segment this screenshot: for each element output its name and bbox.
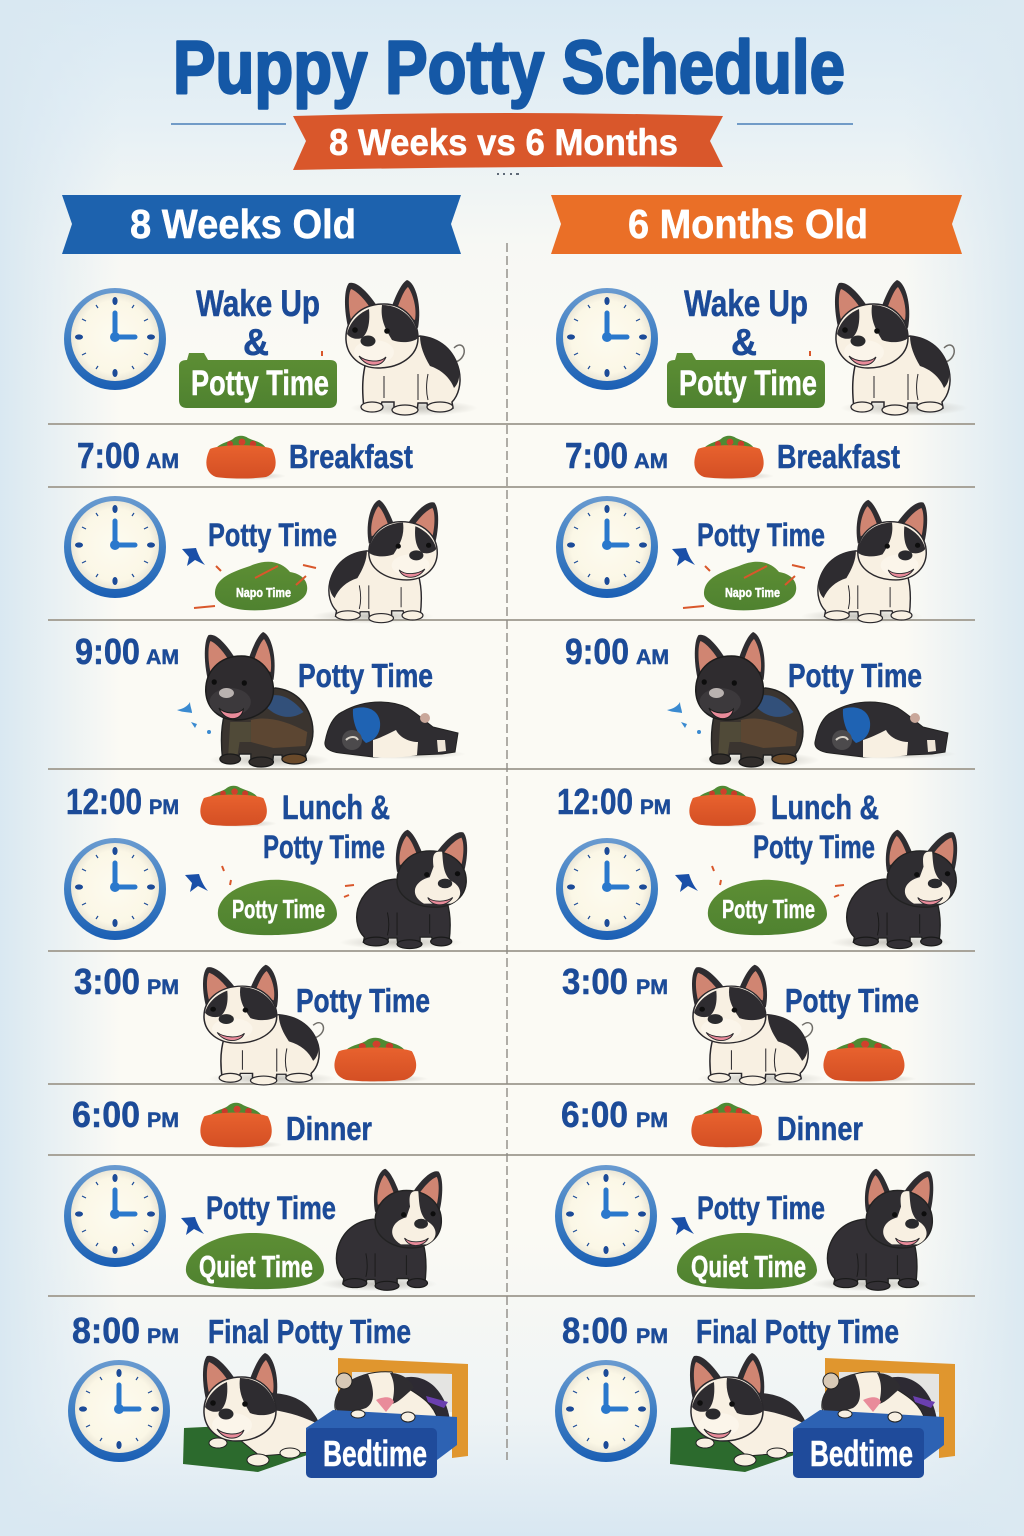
row: final potty and bedtime: 8:00 — [72, 1310, 140, 1351]
row: dinner: 6:00 — [561, 1094, 628, 1135]
title: Puppy Potty Schedule — [173, 25, 845, 109]
row: dinner: 6:00 — [72, 1094, 140, 1135]
row: breakfast: Breakfast — [289, 438, 413, 475]
row: lunch and potty: Lunch & — [771, 789, 879, 827]
row: wake up: Potty Time — [191, 364, 329, 403]
row: final potty and bedtime: Bedtime — [323, 1433, 427, 1474]
row: lunch and potty: Potty Time — [263, 829, 385, 865]
row: lunch and potty: PM — [640, 796, 671, 819]
row: 3:00 potty: Potty Time — [296, 982, 430, 1019]
row: lunch and potty: PM — [149, 796, 179, 819]
row: potty and nap: Napo Time — [236, 585, 291, 600]
row: breakfast: 7:00 — [77, 435, 140, 476]
row: wake up: & — [731, 322, 757, 363]
row: dinner: PM — [147, 1109, 179, 1132]
row: 9:00 potty — [565, 631, 956, 768]
row: wake up — [556, 280, 968, 416]
row: wake up: Wake Up — [684, 283, 808, 324]
row: lunch and potty: 12:00 — [66, 781, 142, 822]
row: final potty and bedtime: PM — [636, 1325, 668, 1348]
row: final potty and bedtime: PM — [147, 1325, 179, 1348]
subtitle ribbon: 8 Weeks vs 6 Months — [329, 122, 678, 163]
row: 3:00 potty: 3:00 — [562, 961, 628, 1002]
row: dinner — [72, 1094, 372, 1149]
row: 9:00 potty: 9:00 — [565, 631, 629, 672]
row: 3:00 potty — [562, 961, 919, 1086]
row: potty and quiet time: Potty Time — [206, 1190, 336, 1226]
row: final potty and bedtime: Final Potty Time — [208, 1313, 411, 1350]
row: lunch and potty: Potty Time — [232, 894, 325, 924]
row: final potty and bedtime — [555, 1310, 955, 1478]
row: potty and quiet time — [555, 1165, 933, 1291]
row: breakfast: Breakfast — [777, 438, 900, 475]
row: potty and nap: Potty Time — [697, 517, 825, 553]
row: wake up: & — [243, 322, 269, 363]
row: breakfast: 7:00 — [565, 435, 628, 476]
row: dinner: Dinner — [286, 1110, 372, 1147]
row: potty and quiet time: Potty Time — [697, 1190, 825, 1226]
row: potty and quiet time: Quiet Time — [199, 1249, 313, 1284]
row: 9:00 potty: Potty Time — [788, 657, 922, 694]
row: 3:00 potty: 3:00 — [74, 961, 140, 1002]
row: dinner — [561, 1094, 863, 1149]
row: potty and quiet time — [64, 1165, 442, 1291]
row: 9:00 potty: 9:00 — [75, 631, 140, 672]
row: wake up: Wake Up — [196, 283, 320, 324]
subtitle ribbon — [171, 113, 853, 174]
row: potty and quiet time: Quiet Time — [691, 1249, 806, 1284]
row: dinner: Dinner — [777, 1110, 863, 1147]
row: 3:00 potty: Potty Time — [785, 982, 919, 1019]
row: 9:00 potty: AM — [146, 646, 179, 669]
row: 3:00 potty: PM — [147, 976, 179, 999]
row: wake up: Potty Time — [679, 364, 817, 403]
header: 6 months old: 6 Months Old — [628, 201, 868, 247]
row: potty and nap — [64, 496, 438, 624]
row: wake up — [64, 280, 478, 416]
panel: 8 weeks column — [64, 280, 478, 1478]
row: 3:00 potty — [74, 961, 430, 1086]
header: 8 weeks old: 8 Weeks Old — [130, 201, 356, 247]
header: 8 weeks old — [62, 195, 461, 254]
row: final potty and bedtime: Bedtime — [810, 1433, 913, 1474]
row: lunch and potty: 12:00 — [557, 781, 633, 822]
row: breakfast — [565, 435, 900, 480]
row: final potty and bedtime: Final Potty Time — [696, 1313, 899, 1350]
row: lunch and potty: Potty Time — [753, 829, 875, 865]
row: potty and nap: Potty Time — [208, 517, 337, 553]
row: lunch and potty: Lunch & — [282, 789, 390, 827]
row: 9:00 potty: AM — [636, 646, 669, 669]
row: final potty and bedtime: 8:00 — [562, 1310, 628, 1351]
header: 6 months old — [551, 195, 962, 254]
row: final potty and bedtime — [68, 1310, 468, 1478]
row: potty and nap — [556, 496, 927, 624]
row: 9:00 potty: Potty Time — [298, 657, 433, 694]
row: lunch and potty — [556, 781, 957, 949]
row: potty and nap: Napo Time — [725, 585, 780, 600]
row: breakfast: AM — [146, 450, 179, 473]
panel: 6 months column — [555, 280, 968, 1478]
row: dinner: PM — [636, 1109, 668, 1132]
row: lunch and potty: Potty Time — [722, 894, 815, 924]
row: breakfast: AM — [634, 450, 668, 473]
row: lunch and potty — [64, 781, 467, 949]
row: 9:00 potty — [75, 631, 466, 768]
row: breakfast — [77, 435, 413, 480]
row: 3:00 potty: PM — [636, 976, 668, 999]
